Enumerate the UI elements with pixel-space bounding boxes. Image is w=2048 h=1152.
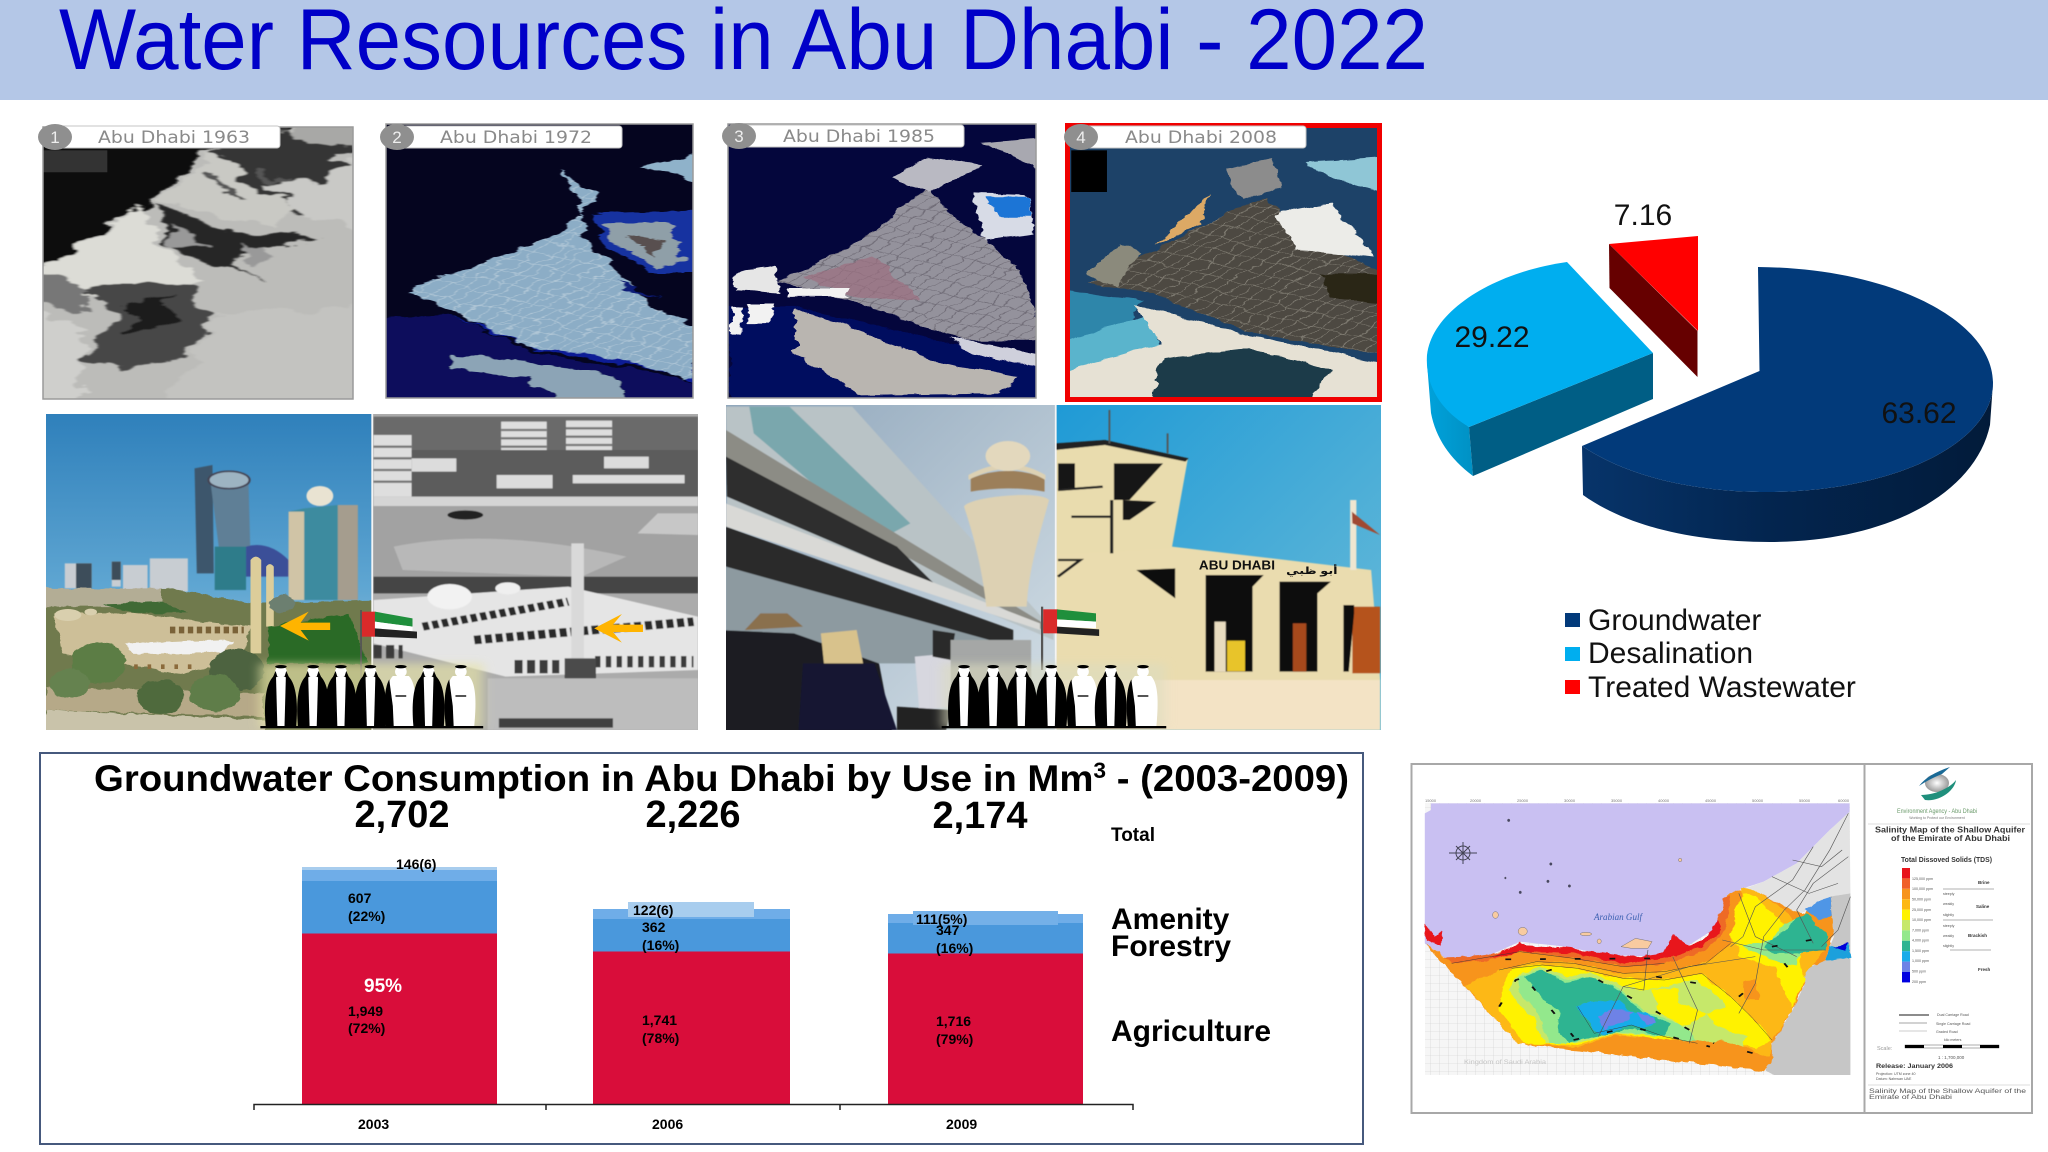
bar 2003: 607 (348, 890, 372, 906)
label: Abu Dhabi 1972: Abu Dhabi 1972 (440, 128, 592, 147)
header band with title (0, 0, 2048, 100)
map side panel: logo (1897, 767, 1977, 820)
neighbouring land south east (1766, 893, 1850, 1075)
icon: row of seven standing men (942, 663, 1166, 728)
map side panel: TDS legend: Fresh (1978, 967, 1991, 972)
sign: Abu Dhabi: ABU DHABI (1199, 558, 1275, 573)
map grid tick labels: 60000 (1838, 798, 1850, 803)
map side panel: TDS legend: steeply (1943, 924, 1955, 928)
map side panel: TDS legend: Total Dissoved Solids (TDS) (1901, 857, 1992, 864)
map side panel: caption: Emirate of Abu Dhabi (1869, 1094, 1952, 1101)
sign: Abu Dhabi: أبو ظبي (1286, 564, 1338, 577)
map side panel: TDS legend: Brine (1978, 880, 1990, 885)
bar 2003: 95% (364, 976, 402, 997)
map side panel: release info: Release: January 2006 (1876, 1064, 1954, 1070)
map side panel: TDS legend: 7,000 ppm (1912, 928, 1929, 932)
panel: salinity map (1412, 764, 2032, 1113)
map side panel: caption: Salinity Map of the Shallow Aquifer of the (1869, 1088, 2027, 1095)
label: Abu Dhabi 2008 (1064, 124, 1306, 150)
sea (1425, 803, 1850, 958)
bar 2009: 347 (936, 922, 960, 938)
map side panel: TDS legend: slightly (1943, 913, 1954, 917)
total 2006: 2,226 (645, 794, 741, 836)
bar 2009: 111(5%) (916, 911, 967, 927)
map side panel: TDS legend: 25,000 ppm (1912, 908, 1931, 912)
panel: airport then and now photo (726, 405, 1381, 730)
slice: groundwater (1582, 267, 1993, 542)
map side panel: TDS legend: 125,000 ppm (1912, 877, 1933, 881)
x axis: 2009 (946, 1116, 977, 1132)
map side panel: TDS legend: weakly (1943, 934, 1954, 938)
map grid tick labels (1425, 798, 1850, 803)
map side panel: TDS legend: Saline (1976, 904, 1990, 909)
total 2003: 2,702 (354, 794, 450, 836)
map side panel: release info (1868, 1064, 2030, 1085)
value label 63.62: 63.62 (1881, 397, 1957, 430)
map grid tick labels: 30000 (1564, 798, 1576, 803)
icon: UAE flag (1041, 607, 1099, 670)
map side panel: scale bar: 1 : 1,700,000 (1938, 1055, 1965, 1060)
x axis (254, 1104, 1133, 1132)
chart heading: Groundwater Consumption in Abu Dhabi by Use in Mm (94, 758, 1059, 799)
slice: treated wastewater (1609, 236, 1698, 377)
sign: Abu Dhabi (1199, 558, 1338, 577)
map grid tick labels: 15000 (1425, 798, 1437, 803)
map side panel: TDS legend: 1,500 ppm (1912, 949, 1929, 953)
map grid tick labels: 50000 (1752, 798, 1764, 803)
bar 2009: 1,716 (936, 1013, 971, 1029)
label Kingdom of Saudi Arabia: Kingdom of Saudi Arabia (1464, 1060, 1547, 1066)
map side panel: scale bar (1877, 1038, 1999, 1060)
label Forestry: Forestry (1111, 930, 1231, 963)
map side panel: TDS legend: weakly (1943, 902, 1954, 906)
map side panel: title (1868, 824, 2030, 843)
label: Abu Dhabi 1972: 2 (392, 128, 402, 147)
icon: yellow arrow right (594, 614, 643, 643)
value label 29.22: 29.22 (1454, 321, 1530, 354)
bar 2006: 122(6) (633, 902, 673, 918)
x axis: 2006 (652, 1116, 683, 1132)
map side panel: logo: Working to Protect our Environment (1909, 816, 1965, 820)
panel: groundwater consumption stacked bar chart (40, 753, 1363, 1144)
bar 2003: (22%) (348, 908, 385, 924)
map side panel: road legend: Graded Road (1936, 1030, 1958, 1034)
map side panel: TDS legend: 50,000 ppm (1912, 898, 1931, 902)
x axis: 2003 (358, 1116, 389, 1132)
map side panel: caption (1869, 1088, 2027, 1101)
map side panel: TDS legend: steeply (1943, 892, 1955, 896)
label: Abu Dhabi 1985 (722, 123, 964, 149)
map side panel: scale bar: kilo meters (1944, 1038, 1962, 1042)
bar 2009: (79%) (936, 1031, 973, 1047)
label Total: Total (1111, 825, 1155, 846)
neighbouring land north east (1741, 812, 1850, 913)
legend: water sources: Groundwater (1588, 604, 1761, 637)
bar 2003: (72%) (348, 1020, 385, 1036)
bar 2009 (888, 911, 1083, 1104)
label: Abu Dhabi 1985: Abu Dhabi 1985 (783, 127, 935, 146)
label: Abu Dhabi 1963: Abu Dhabi 1963 (98, 128, 250, 147)
value label 7.16: 7.16 (1614, 199, 1672, 232)
label Agriculture: Agriculture (1111, 1015, 1271, 1048)
islands (1493, 819, 1682, 948)
map side panel: road legend (1899, 1013, 1970, 1034)
bar 2003: 146(6) (396, 856, 436, 872)
bar 2003 (302, 856, 497, 1104)
contour layers (1425, 888, 1850, 1071)
bar 2003: 1,949 (348, 1003, 383, 1019)
map grid tick labels: 40000 (1658, 798, 1670, 803)
legend: water sources (1565, 604, 1856, 704)
map side panel: road legend: Dual Carriage Road (1937, 1013, 1969, 1017)
map side panel: scale bar: Scale: (1877, 1046, 1893, 1052)
map grid tick labels: 55000 (1799, 798, 1811, 803)
bar 2006: (16%) (642, 937, 679, 953)
map side panel: title: of the Emirate of Abu Dhabi (1891, 833, 2010, 843)
panel: satellite image 1963 (18, 117, 375, 407)
label: Abu Dhabi 1963: 1 (50, 128, 60, 147)
bar 2009: (16%) (936, 940, 973, 956)
map side panel: logo: Environment Agency - Abu Dhabi (1897, 809, 1977, 815)
label: Abu Dhabi 1985: 3 (734, 127, 744, 146)
map side panel: TDS legend: Brackish (1968, 933, 1987, 938)
map grid tick labels: 35000 (1611, 798, 1623, 803)
map side panel: TDS legend: 100,000 ppm (1912, 887, 1933, 891)
icon: UAE flag (360, 610, 417, 690)
bar 2006: (78%) (642, 1030, 679, 1046)
icon: yellow arrow left (280, 612, 330, 641)
panel: mosque then and now photo (46, 414, 698, 730)
legend: water sources: Desalination (1588, 637, 1753, 670)
panel: satellite image 2008 (1044, 123, 1402, 407)
map grid tick labels: 45000 (1705, 798, 1717, 803)
panel: satellite image 1972 (357, 124, 714, 407)
icon: row of seven standing men (259, 663, 483, 728)
map side panel: release info: Projection: UTM zone 40 (1876, 1072, 1916, 1076)
label: Abu Dhabi 2008: 4 (1076, 128, 1086, 147)
map side panel: TDS legend (1901, 857, 1994, 984)
map grid tick labels: 20000 (1470, 798, 1482, 803)
bar 2006 (593, 902, 790, 1104)
map: shallow aquifer salinity contours (1425, 798, 1850, 1075)
label: Abu Dhabi 1963 (38, 124, 280, 150)
map grid tick labels: 25000 (1517, 798, 1529, 803)
chart heading: 3 (1093, 758, 1106, 783)
label Amenity: Amenity (1111, 903, 1230, 936)
label: Abu Dhabi 1972 (380, 124, 622, 150)
panel: satellite image 1985 (722, 123, 1054, 400)
map side panel: TDS legend: 1,000 ppm (1912, 959, 1929, 963)
legend: water sources: Treated Wastewater (1588, 671, 1856, 704)
map side panel: TDS legend: 500 ppm (1912, 970, 1926, 974)
map side panel: TDS legend: 200 ppm (1912, 980, 1926, 984)
icon: compass rose (1449, 842, 1477, 864)
map side panel: TDS legend: 4,000 ppm (1912, 938, 1929, 942)
map side panel: release info: Datum: Nahrwan UAE (1876, 1077, 1912, 1081)
total 2009: 2,174 (932, 795, 1028, 837)
label Arabian Gulf: Arabian Gulf (1593, 912, 1643, 922)
roads and contour lines (1452, 813, 1850, 1058)
slice: desalination (1427, 262, 1653, 476)
map side panel: TDS legend: 10,000 ppm (1912, 918, 1931, 922)
map side panel: TDS legend: slightly (1943, 944, 1954, 948)
map side panel: road legend: Single Carriage Road (1936, 1022, 1970, 1026)
bar 2006: 1,741 (642, 1012, 677, 1028)
chart: 3D exploded pie of water sources (1427, 199, 1993, 542)
label: Abu Dhabi 2008: Abu Dhabi 2008 (1125, 128, 1277, 147)
bar 2006: 362 (642, 919, 666, 935)
map side panel: title: Salinity Map of the Shallow Aquifer (1875, 824, 2026, 834)
chart heading: - (2003-2009) (1106, 758, 1349, 799)
